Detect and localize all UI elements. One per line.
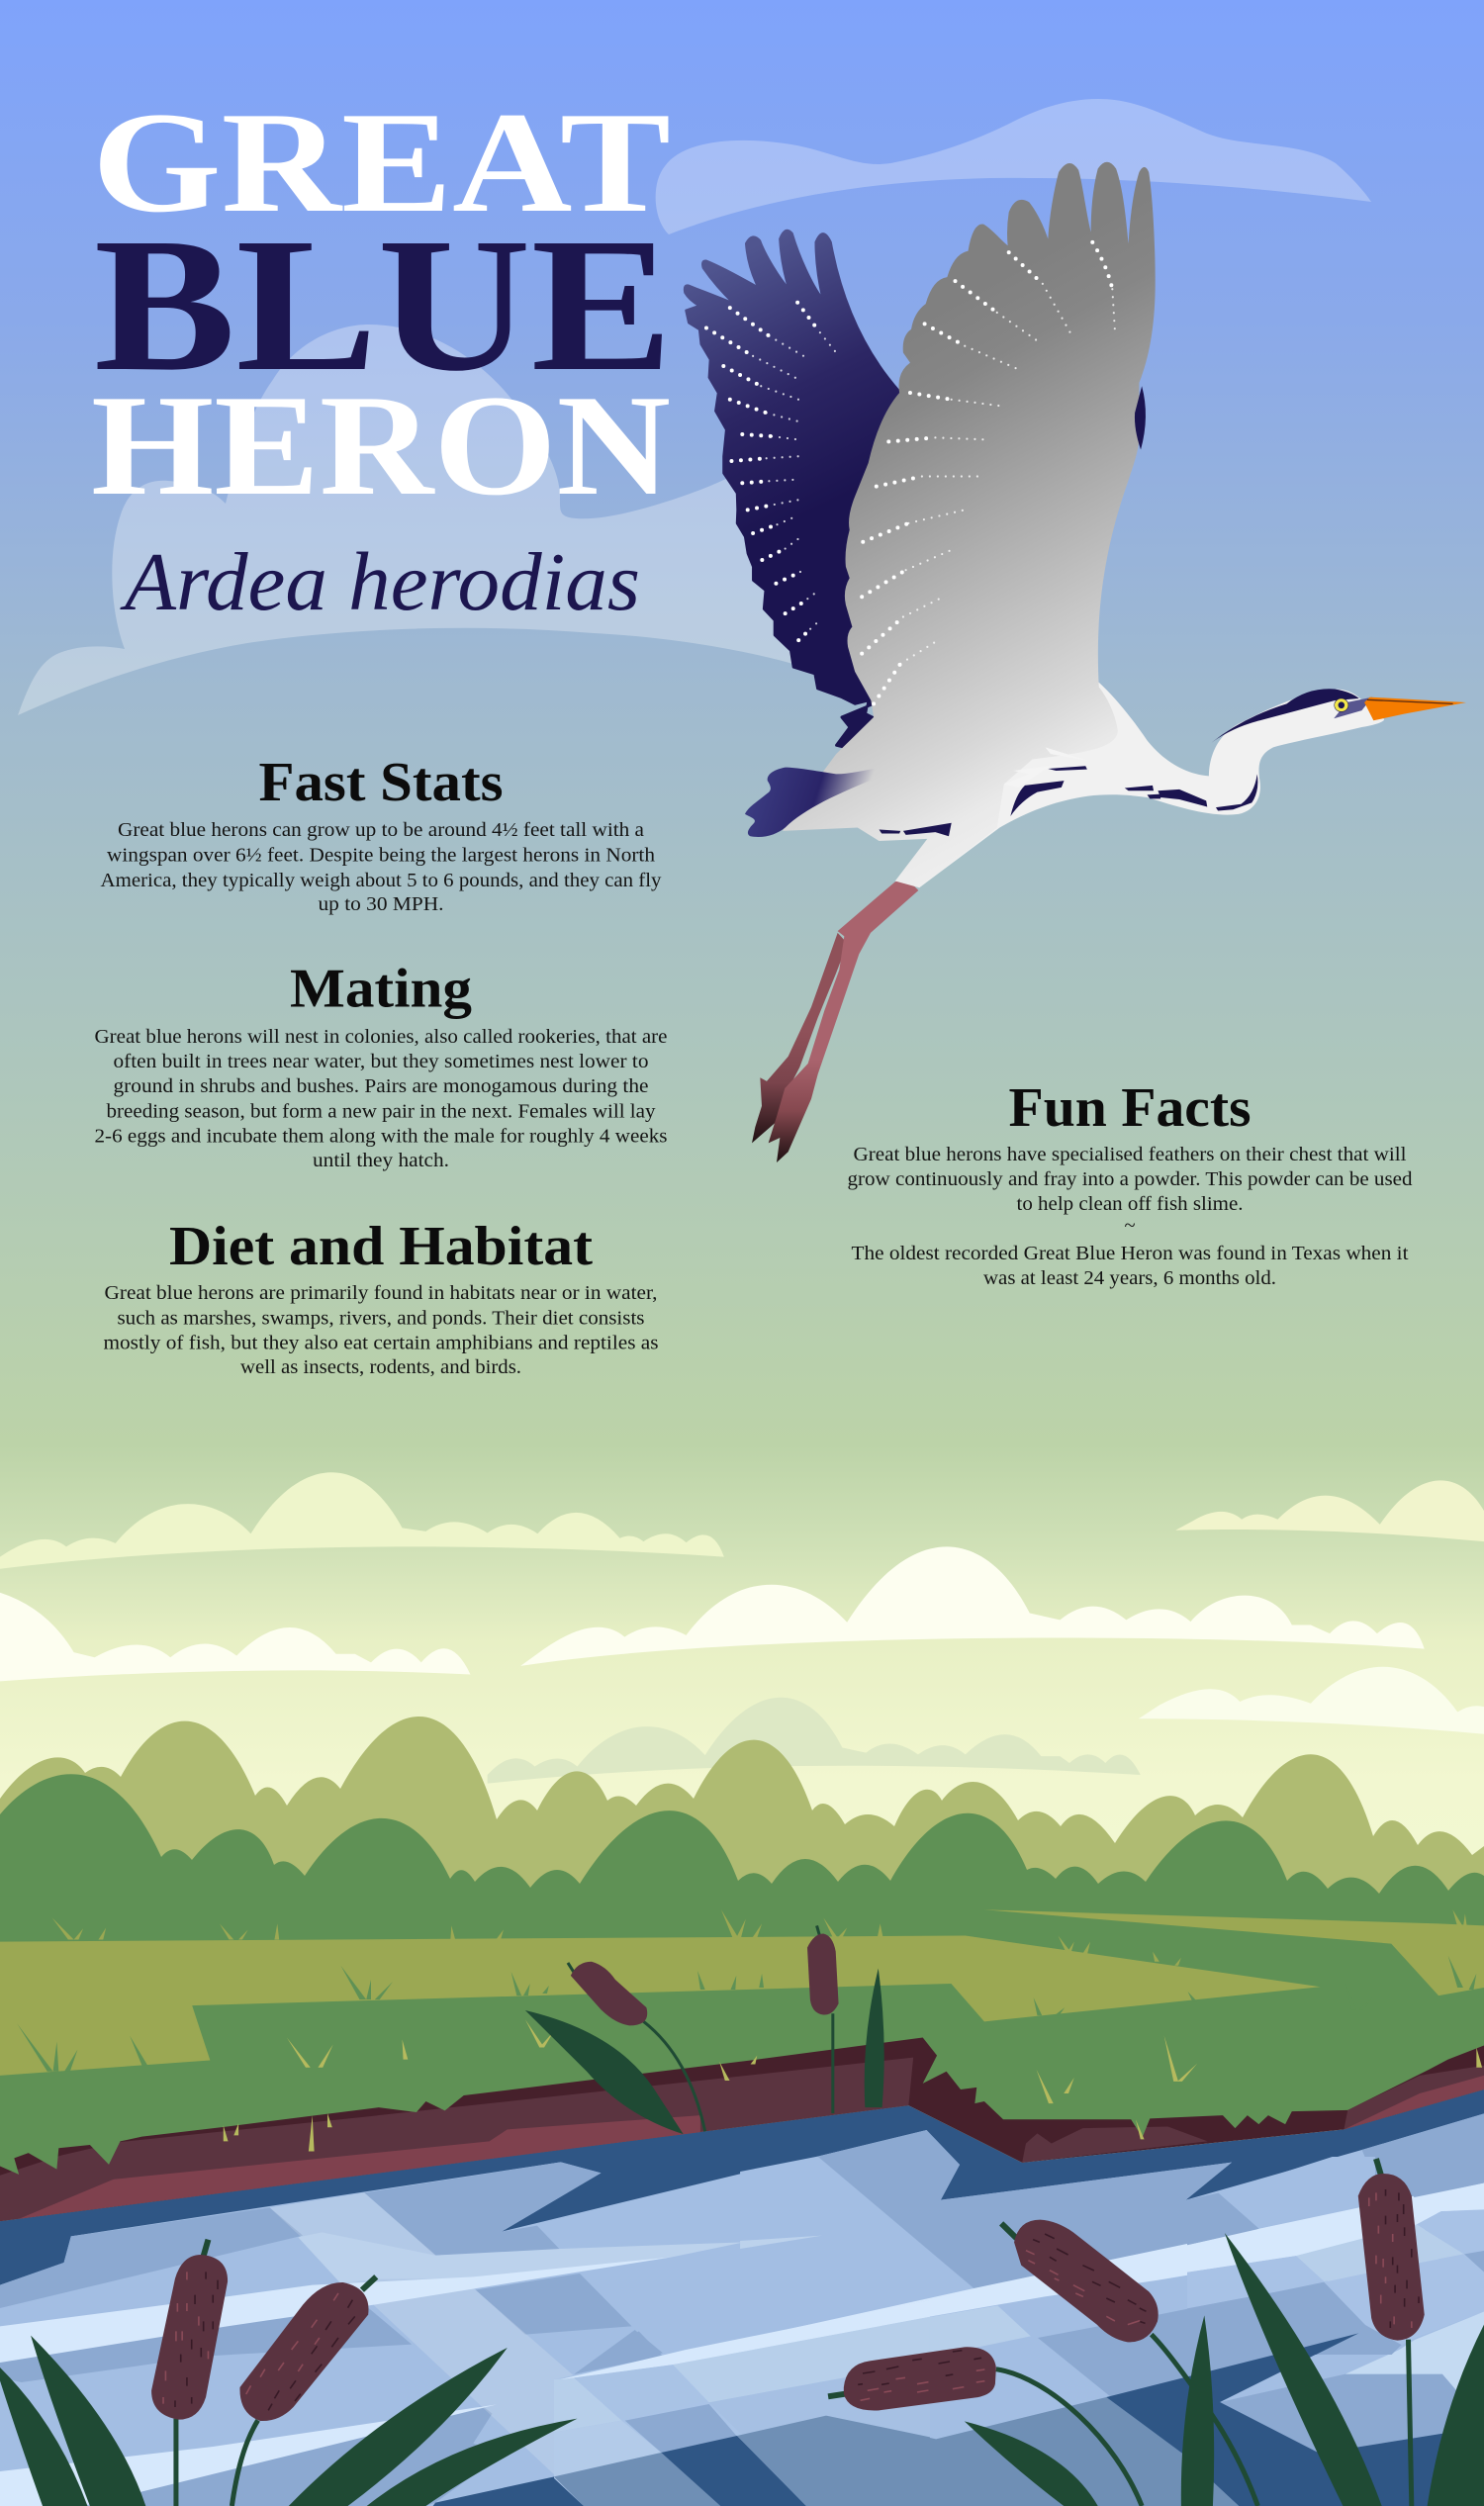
heading: Fast Stats: Fast Stats: [259, 752, 503, 813]
water surface, right: [740, 2113, 1484, 2506]
cloud: faint green behind hills: [488, 1698, 1141, 1784]
body: Fast Stats: Great blue herons can grow up to be around 4½ feet tall with a: [118, 819, 644, 841]
cloud: behind title: [18, 325, 821, 715]
body: Fast Stats: [101, 819, 662, 915]
riverbank: mid soil: [0, 2058, 1484, 2221]
water: right bend facets: [1187, 2157, 1484, 2355]
cattail: centre horizontal: [828, 2347, 1142, 2506]
water: right half facets: [740, 2113, 1484, 2506]
body: Fun Facts: Great blue herons have specialised feathers on their chest that will: [853, 1144, 1407, 1165]
heron: near wing and body: [783, 162, 1156, 887]
distant clouds: [0, 1472, 1484, 1784]
title line: BLUE: BLUE: [94, 198, 673, 411]
leaf: bank, upright: [865, 1969, 884, 2107]
body: Mating: [95, 1026, 668, 1171]
foreground right cattails and reeds: [828, 2159, 1484, 2506]
cattail: small, bank left: [568, 1962, 705, 2131]
text block: Fun Facts: [847, 1077, 1413, 1289]
cloud: upper right: [656, 99, 1371, 234]
heron: far wing: [685, 231, 1018, 747]
body: Fun Facts: [847, 1144, 1413, 1289]
great blue heron in flight: [685, 162, 1466, 1162]
body: Fun Facts: to help clean off fish slime.: [1017, 1193, 1243, 1215]
body: Mating: until they hatch.: [313, 1150, 449, 1171]
title: [91, 82, 673, 525]
body: Diet and Habitat: mostly of fish, but they also eat certain amphibians and reptiles as: [103, 1332, 659, 1353]
body: Mating: breeding season, but form a new pair in the next. Females will lay: [107, 1100, 656, 1122]
near hills and treeline: [0, 1774, 1484, 2078]
reeds: left leaves: [0, 2336, 578, 2506]
heading: Mating: Mating: [290, 958, 472, 1019]
water surface, left: [0, 2162, 744, 2506]
body: Diet and Habitat: [103, 1282, 659, 1378]
heron: beak line: [1367, 699, 1453, 703]
body: Mating: often built in trees near water, but they sometimes nest lower to: [113, 1051, 649, 1072]
body: Fun Facts: The oldest recorded Great Blue Heron was found in Texas when it: [851, 1243, 1409, 1264]
text block: Mating: [95, 958, 668, 1171]
body: Fast Stats: up to 30 MPH.: [319, 893, 443, 915]
subtitle: scientific name: Ardea herodias: [120, 536, 640, 628]
heron: legs: [752, 881, 918, 1162]
cattail: right upright: [1358, 2159, 1425, 2506]
foreground left cattails and reeds: [0, 2240, 578, 2506]
body: Fast Stats: wingspan over 6½ feet. Despite being the largest herons in North: [107, 845, 655, 867]
text block: Fast Stats: [101, 752, 662, 915]
body: Mating: ground in shrubs and bushes. Pairs are monogamous during the: [113, 1075, 649, 1097]
body: Fun Facts: grow continuously and fray into a powder. This powder can be used: [847, 1168, 1413, 1190]
heron: chest wisps: [1004, 747, 1088, 788]
text block: Diet and Habitat: [103, 1216, 659, 1378]
body: Diet and Habitat: such as marshes, swamps, rivers, and ponds. Their diet consists: [117, 1308, 645, 1330]
heron: dark body markings: [880, 766, 1257, 836]
title line: GREAT: GREAT: [92, 82, 671, 242]
body: Diet and Habitat: well as insects, rodents, and birds.: [240, 1356, 521, 1378]
cattail: right tilted: [1001, 2220, 1257, 2506]
heron: rear leg: [752, 933, 848, 1143]
body: Fun Facts: ~: [1124, 1215, 1136, 1237]
leaf: bank, curved: [525, 2010, 684, 2134]
water facets, left: [0, 2162, 744, 2506]
cloud: upper right cream: [1175, 1480, 1484, 1541]
water facets, right: [740, 2113, 1484, 2506]
heron: eye: [1335, 698, 1348, 711]
cloud: right white: [1139, 1667, 1484, 1734]
heron: tail feathers: [745, 764, 911, 837]
heron: head cap and neck plume: [1212, 689, 1359, 743]
water: deep blue shadow along bank: [0, 2089, 1484, 2506]
bank and marsh field: [0, 1896, 1484, 2221]
body: Mating: Great blue herons will nest in colonies, also called rookeries, that are: [95, 1026, 667, 1048]
olive field, right: [984, 1909, 1484, 1996]
heron: beak: [1364, 697, 1466, 720]
heron: wing shoulder mark: [1135, 386, 1146, 449]
cloud: upper left cream: [0, 1472, 724, 1569]
heron: white neck and chest: [919, 683, 1384, 887]
cattail: left upright: [151, 2240, 228, 2506]
olive field, left: [0, 1936, 1320, 2076]
body: Fast Stats: America, they typically weigh about 5 to 6 pounds, and they can fly: [101, 870, 662, 891]
heron: front leg: [769, 881, 918, 1162]
body: Mating: 2-6 eggs and incubate them along with the male for roughly 4 weeks: [95, 1126, 668, 1148]
riverbank: light soil: [19, 2076, 1484, 2219]
grass tufts: [17, 1909, 1482, 2152]
cattail: small, bank right: [807, 1925, 839, 2113]
cloud: centre white: [520, 1546, 1425, 1666]
water: left half facets: [0, 2162, 744, 2506]
cattail: left tilted: [232, 2276, 376, 2506]
heron: wing feather dots: [706, 242, 1115, 703]
cloud: left white: [0, 1593, 470, 1681]
heading: Fun Facts: Fun Facts: [1009, 1077, 1251, 1139]
grass field: [0, 1896, 1484, 2175]
riverbank: dark soil: [0, 1999, 1484, 2221]
reeds: right leaves: [965, 2233, 1484, 2506]
heron: face mask: [1334, 697, 1372, 718]
far hills: [0, 1717, 1484, 1939]
body: Diet and Habitat: Great blue herons are primarily found in habitats near or in water,: [105, 1282, 657, 1304]
heading: Diet and Habitat: Diet and Habitat: [169, 1216, 593, 1277]
water: centre facets: [554, 2300, 930, 2506]
body: Fun Facts: was at least 24 years, 6 months old.: [983, 1267, 1276, 1289]
title line: HERON: HERON: [91, 365, 671, 525]
